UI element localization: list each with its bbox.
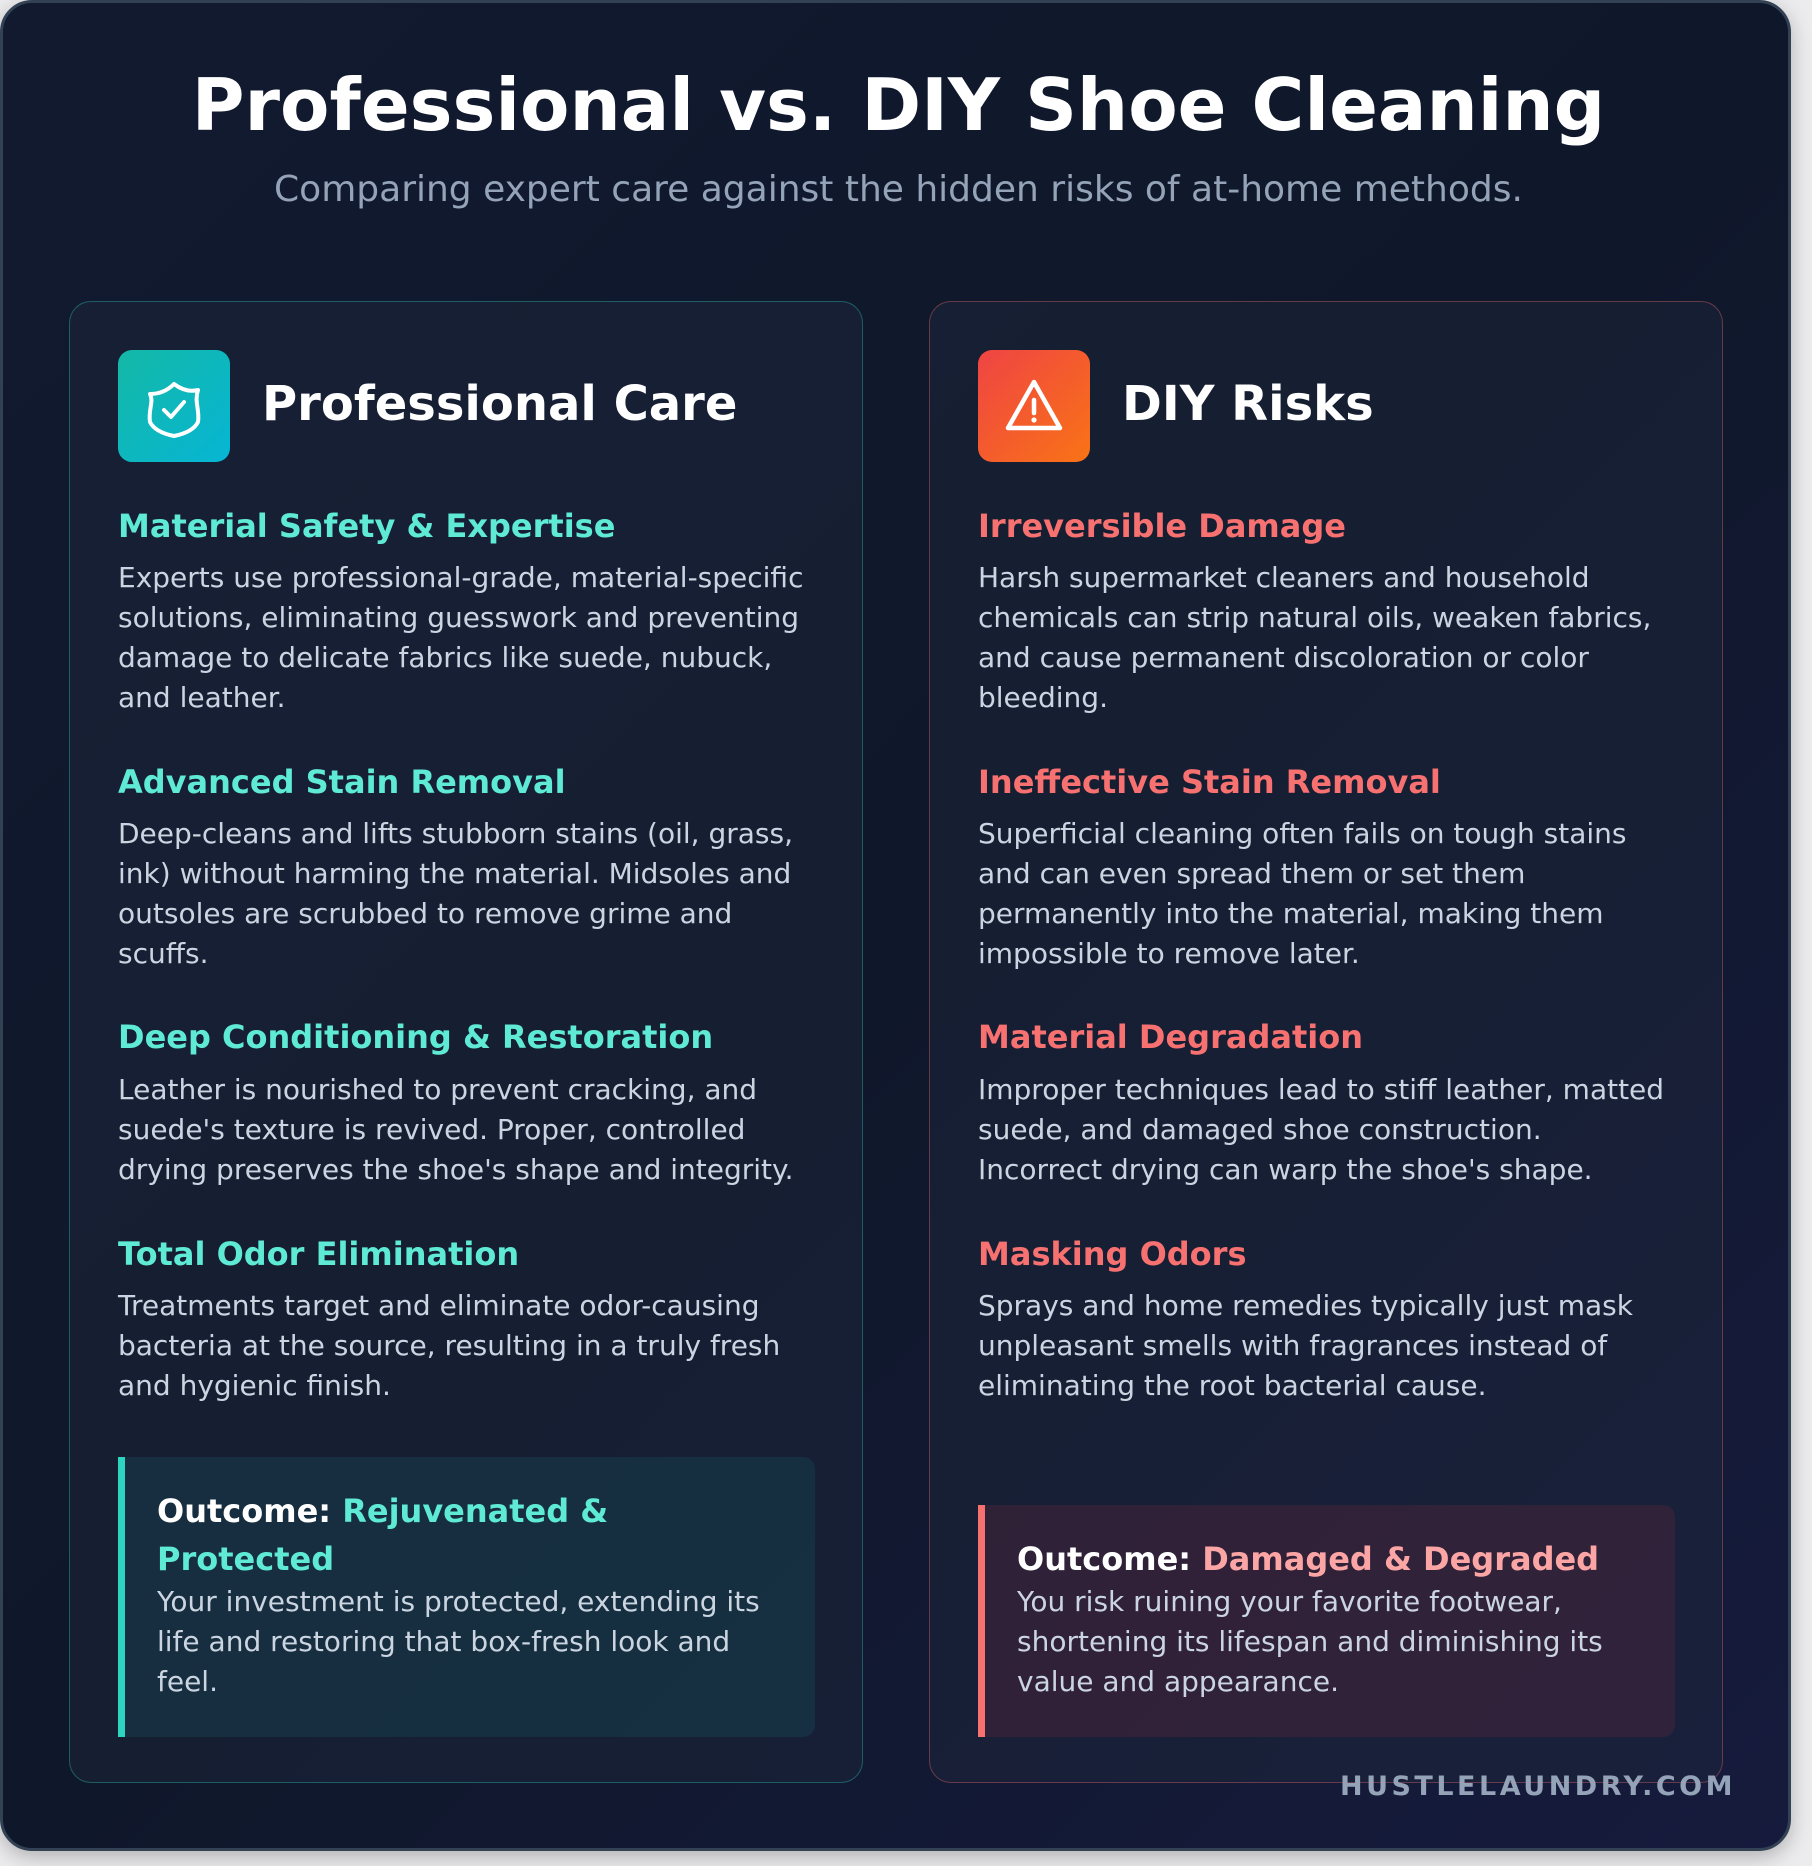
section: ineffective stain removal: Ineffective Stain Removal bbox=[978, 763, 1441, 801]
outcome box: professional bbox=[118, 1457, 815, 1737]
panel: DIY risks: Incorrect drying can warp the shoe's shape. bbox=[978, 1153, 1593, 1186]
panel: DIY risks: impossible to remove later. bbox=[978, 937, 1360, 970]
panel heading: DIY Risks bbox=[1122, 376, 1374, 432]
panel: DIY risks: suede, and damaged shoe construction. bbox=[978, 1113, 1542, 1146]
panel: professional care: scuffs. bbox=[118, 937, 209, 970]
section: masking odors: Masking Odors bbox=[978, 1235, 1246, 1273]
panel: professional care: Treatments target and eliminate odor-causing bbox=[118, 1289, 759, 1322]
panel: DIY risks: and can even spread them or set them bbox=[978, 857, 1525, 890]
outcome box: professional: Protected bbox=[157, 1540, 334, 1578]
section: irreversible damage: Irreversible Damage bbox=[978, 507, 1346, 545]
panel: DIY risks: and cause permanent discoloration or color bbox=[978, 641, 1589, 674]
outcome box: professional: life and restoring that box-fresh look and bbox=[157, 1625, 730, 1658]
title: Professional vs. DIY Shoe Cleaning bbox=[192, 63, 1605, 147]
panel: DIY risks: chemicals can strip natural oils, weaken fabrics, bbox=[978, 601, 1651, 634]
panel: DIY risks: Sprays and home remedies typically just mask bbox=[978, 1289, 1633, 1322]
panel: professional care: ink) without harming the material. Midsoles and bbox=[118, 857, 791, 890]
panel: DIY risks: Superficial cleaning often fails on tough stains bbox=[978, 817, 1626, 850]
section: stain removal: Advanced Stain Removal bbox=[118, 763, 566, 801]
panel: professional care: damage to delicate fabrics like suede, nubuck, bbox=[118, 641, 772, 674]
panel: professional care: Leather is nourished to prevent cracking, and bbox=[118, 1073, 757, 1106]
footer brand: HUSTLELAUNDRY.COM bbox=[1340, 1771, 1736, 1802]
panel: professional care: Experts use professional-grade, material-specific bbox=[118, 561, 803, 594]
outcome box: professional: Your investment is protected, extending its bbox=[157, 1585, 760, 1618]
panel: DIY risks: Harsh supermarket cleaners and household bbox=[978, 561, 1590, 594]
panel: DIY risks: unpleasant smells with fragrances instead of bbox=[978, 1329, 1607, 1362]
outcome box: professional: Outcome: Rejuvenated & bbox=[157, 1492, 608, 1530]
panel: professional care: outsoles are scrubbed to remove grime and bbox=[118, 897, 732, 930]
outcome box: DIY: shortening its lifespan and diminishing its bbox=[1017, 1625, 1603, 1658]
outcome box: DIY: Outcome: Damaged & Degraded bbox=[1017, 1540, 1599, 1578]
section: odor: Total Odor Elimination bbox=[118, 1235, 519, 1273]
subtitle: Comparing expert care against the hidden risks of at-home methods. bbox=[274, 169, 1523, 210]
section: material safety: Material Safety & Expertise bbox=[118, 507, 615, 545]
panel heading: Professional Care bbox=[262, 376, 737, 432]
panel: professional care: Deep-cleans and lifts stubborn stains (oil, grass, bbox=[118, 817, 793, 850]
panel: professional care: and hygienic finish. bbox=[118, 1369, 391, 1402]
panel: DIY risks: bleeding. bbox=[978, 681, 1108, 714]
panel: professional care: solutions, eliminating guesswork and preventing bbox=[118, 601, 799, 634]
panel: professional care: and leather. bbox=[118, 681, 286, 714]
panel: professional care: suede's texture is revived. Proper, controlled bbox=[118, 1113, 745, 1146]
panel: professional care: bacteria at the source, resulting in a truly fresh bbox=[118, 1329, 780, 1362]
icon: warning bbox=[978, 350, 1090, 462]
section: degradation: Material Degradation bbox=[978, 1018, 1363, 1056]
panel: DIY risks: eliminating the root bacterial cause. bbox=[978, 1369, 1486, 1402]
panel: DIY risks: permanently into the material, making them bbox=[978, 897, 1604, 930]
panel: professional care: drying preserves the shoe's shape and integrity. bbox=[118, 1153, 794, 1186]
panel: professional care bbox=[69, 301, 863, 1783]
panel: DIY risks: Improper techniques lead to stiff leather, matted bbox=[978, 1073, 1664, 1106]
outcome box: DIY bbox=[978, 1505, 1675, 1737]
icon: shield check bbox=[118, 350, 230, 462]
section: conditioning: Deep Conditioning & Restoration bbox=[118, 1018, 713, 1056]
outcome box: professional: feel. bbox=[157, 1665, 218, 1698]
outcome box: DIY: You risk ruining your favorite footwear, bbox=[1017, 1585, 1562, 1618]
outcome box: DIY: value and appearance. bbox=[1017, 1665, 1339, 1698]
panel: DIY risks bbox=[929, 301, 1723, 1783]
